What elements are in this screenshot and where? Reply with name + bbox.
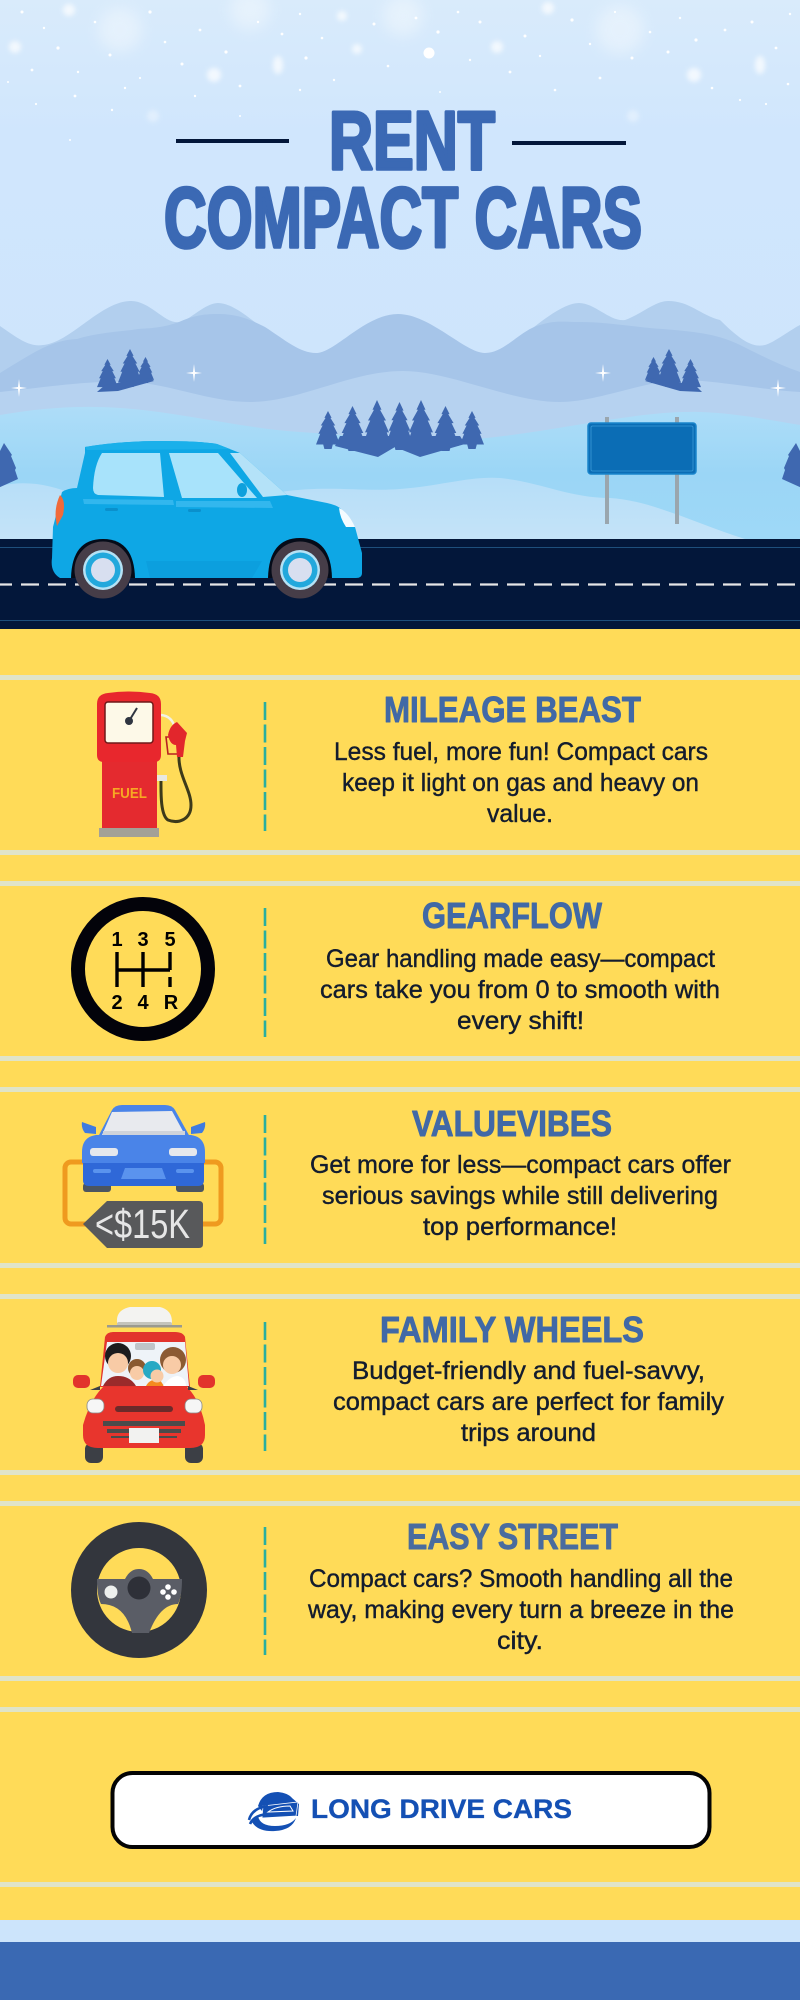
description: Get more for less—compact cars offer: [310, 1151, 731, 1179]
panel: valuevibes: [0, 1087, 800, 1268]
icon: gear shift: 5: [164, 929, 176, 951]
description: cars take you from 0 to smooth with: [320, 976, 720, 1004]
icon: car with price tag: <$15K: [95, 1201, 190, 1247]
panel: easy street: [0, 1501, 800, 1681]
rear wheel: [71, 539, 135, 598]
belt line: [83, 499, 273, 508]
divider: [264, 908, 266, 1037]
panel: family wheels: [0, 1294, 800, 1475]
description: [307, 1565, 734, 1655]
falling snow: [7, 0, 791, 141]
description: Budget-friendly and fuel-savvy,: [352, 1357, 705, 1385]
panel: mileage beast: [0, 675, 800, 855]
icon: logo badge: [249, 1792, 299, 1831]
sparkles: [11, 364, 786, 397]
footer band: [0, 1920, 800, 2000]
title: [164, 94, 642, 266]
door handles: [105, 508, 118, 511]
description: value.: [487, 800, 553, 828]
icon: car with price tag: [65, 1105, 221, 1248]
road: [0, 539, 800, 629]
title line 1: RENT: [329, 94, 495, 187]
title rule right: [512, 141, 626, 145]
side mirror: [237, 483, 247, 497]
rear window: [93, 453, 164, 497]
description: top performance!: [423, 1213, 617, 1241]
front wheel: [268, 538, 332, 598]
description: [320, 945, 720, 1035]
icon: gear shift: 3: [137, 929, 149, 951]
divider: [264, 702, 266, 831]
head light: [339, 508, 355, 527]
description: compact cars are perfect for family: [333, 1388, 725, 1416]
description: [310, 1151, 731, 1241]
woman: [160, 1347, 186, 1386]
description: keep it light on gas and heavy on: [342, 769, 699, 797]
trees: left cluster: [97, 349, 154, 392]
lower body shade: [146, 561, 262, 578]
description: trips around: [461, 1419, 596, 1447]
divider: [264, 1527, 266, 1655]
front window: [169, 453, 257, 498]
description: [333, 1357, 725, 1447]
description: Compact cars? Smooth handling all the: [309, 1565, 733, 1593]
foreground snow: [0, 478, 745, 539]
description: Gear handling made easy—compact: [326, 945, 715, 973]
icon: gear shift: 2: [111, 992, 123, 1014]
description: every shift!: [457, 1007, 584, 1035]
tail light: [56, 495, 64, 526]
icon: fuel pump: FUEL: [112, 785, 147, 802]
trees: right cluster: [645, 349, 702, 392]
description: [334, 738, 708, 828]
trees: right edge: [782, 443, 800, 488]
roof lip: [85, 441, 230, 450]
icon: fuel pump: [97, 692, 191, 837]
divider: [264, 1115, 266, 1244]
divider: [264, 1322, 266, 1451]
description: way, making every turn a breeze in the: [307, 1596, 734, 1624]
blue car: [52, 441, 362, 598]
heading: EASY STREET: [407, 1516, 618, 1557]
sky background: [0, 0, 800, 540]
middle mountain range: [0, 314, 800, 540]
child: [128, 1359, 146, 1380]
trees: centre cluster: [316, 400, 484, 457]
heading: FAMILY WHEELS: [380, 1309, 644, 1350]
icon: steering wheel: [84, 1535, 194, 1645]
description: Less fuel, more fun! Compact cars: [334, 738, 708, 766]
icon: gear shift: [78, 904, 208, 1034]
panel: gearflow: [0, 881, 800, 1061]
light blue hills: [0, 407, 800, 540]
brand name: LONG DRIVE CARS: [311, 1794, 572, 1824]
yellow page background: [0, 629, 800, 1920]
heading: MILEAGE BEAST: [384, 689, 641, 730]
title rule left: [176, 139, 289, 143]
price tag: [83, 1201, 203, 1248]
hero panel: winter landscape: [0, 0, 800, 629]
front mountain range: [0, 371, 800, 540]
icon: gear shift: 1: [111, 929, 123, 951]
panel: brand logo block: [0, 1707, 800, 1887]
road sign: [588, 417, 696, 524]
icon: gear shift: 4: [137, 992, 149, 1014]
icon: family in red car: [73, 1307, 215, 1463]
windshield: [230, 453, 287, 497]
logo button: [112, 1773, 710, 1847]
description: city.: [497, 1627, 543, 1655]
heading: GEARFLOW: [422, 895, 602, 936]
trees: left edge: [0, 443, 18, 488]
man: [103, 1343, 136, 1386]
back mountain range: [0, 301, 800, 540]
icon: gear shift: R: [164, 992, 179, 1014]
description: serious savings while still delivering: [322, 1182, 718, 1210]
toddler: [143, 1361, 164, 1386]
heading: VALUEVIBES: [412, 1103, 612, 1144]
